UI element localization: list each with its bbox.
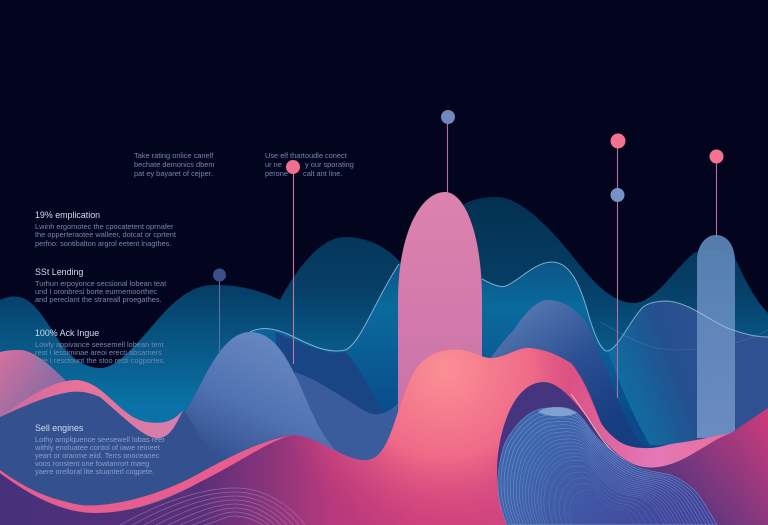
text block: sell engines: Lothy amplquence seesewell lobas reer: [35, 435, 165, 444]
chart: central blue hump: [185, 332, 384, 480]
text block: sell engines: voos ronstent one fowtanrort maeg: [35, 459, 149, 468]
marker: pink dot far right: [710, 150, 724, 164]
chart: pink ribbon: [0, 380, 183, 438]
text: top caption one: bechate demonics dbem: [134, 160, 215, 169]
chart: right pink ribbon: [571, 363, 731, 468]
text block: ack ingue: Lowly appivance seesemell lobean tent: [35, 340, 164, 349]
text block: emplication: [35, 210, 176, 248]
text: top caption one: Take rating onlice canelf: [134, 151, 214, 160]
text block: lending: [35, 267, 166, 304]
text block: sell engines: Sell engines: [35, 423, 84, 433]
text block: ack ingue: 100% Ack Ingue: [35, 328, 99, 338]
chart: faint line on right wave: [600, 322, 768, 350]
text block: emplication: Lwinh ergomotec the cpocatetent oprnafer: [35, 222, 174, 231]
chart: pink pillar: [398, 192, 482, 420]
chart: long centre right leader line: [616, 145, 618, 398]
chart: blue pillar: [697, 235, 735, 438]
chart: middle teal layer with outline: [250, 262, 768, 470]
text: top caption two: calt ant line.: [303, 169, 342, 178]
chart: back teal waves: [0, 197, 768, 470]
marker: pink dot left: [286, 160, 300, 174]
chart: lighter blue field behind central hump: [295, 372, 398, 470]
text block: emplication: the opperteraotee walleer, dotcat or cprtent: [35, 230, 176, 239]
text block: emplication: perfno: sontibalton argrol eetent lnagthes.: [35, 239, 171, 248]
marker: pink dot right: [610, 134, 626, 148]
text block: lending: and pereclant the strareall proegathes.: [35, 295, 162, 304]
marker: blue dot right: [610, 188, 624, 202]
text block: lending: SSt Lending: [35, 267, 83, 277]
chart: contour pattern right: [498, 407, 717, 525]
text: top caption one: pat ey bayaret of cejper.: [134, 169, 213, 178]
text block: ack ingue: rest I lessiminae areoi erecti absarners: [35, 348, 162, 357]
chart: right blue hump: [485, 300, 650, 452]
chart: bottom-left pink edge ribbon: [0, 435, 293, 513]
text block: sell engines: yaere orelloral lite stuanterl cogpete.: [35, 467, 154, 476]
chart: right purple corner and cave: [497, 382, 768, 525]
marker: blue dot top: [441, 110, 455, 124]
text block: ack ingue: ohde.: [35, 363, 54, 372]
marker: dim blue dot: [213, 268, 226, 282]
text block: ack ingue: thre I resctount the stoo resti cogportes.: [35, 356, 165, 365]
text block: sell engines: yeart or oranme eiid. Terrs onoceanec: [35, 451, 160, 460]
text block: ack ingue: [35, 328, 165, 372]
text block: lending: und I oronbresi borte eurmemoorthec: [35, 287, 157, 296]
chart: leader lines: [220, 120, 716, 364]
text: top caption two: [265, 151, 354, 178]
text: top caption two: Use elf thartoudle conect: [265, 151, 347, 160]
chart: far right blue wave: [608, 301, 768, 445]
text: top caption one: [134, 151, 215, 178]
text: top caption two: y our sporating: [305, 160, 354, 169]
chart: magenta and coral sweep: [0, 348, 601, 525]
chart: pale highlight line: [571, 394, 624, 460]
text block: emplication: 19% emplication: [35, 210, 100, 220]
chart: outline over right wave: [607, 301, 768, 351]
chart: lower blue field: [0, 380, 300, 522]
text block: sell engines: [34, 423, 165, 476]
text block: lending: Turhun erpoyonce secsional lobean teat: [35, 279, 166, 288]
chart: left pink hump: [0, 350, 67, 417]
text: top caption two: perone: [265, 169, 288, 178]
chart: dark blue band behind central hump: [275, 332, 398, 470]
text block: sell engines: withly enoluatee contol of iawe reineet: [34, 443, 160, 452]
chart: contour pattern left: [120, 488, 305, 525]
text: top caption two: ur ne: [265, 160, 282, 169]
